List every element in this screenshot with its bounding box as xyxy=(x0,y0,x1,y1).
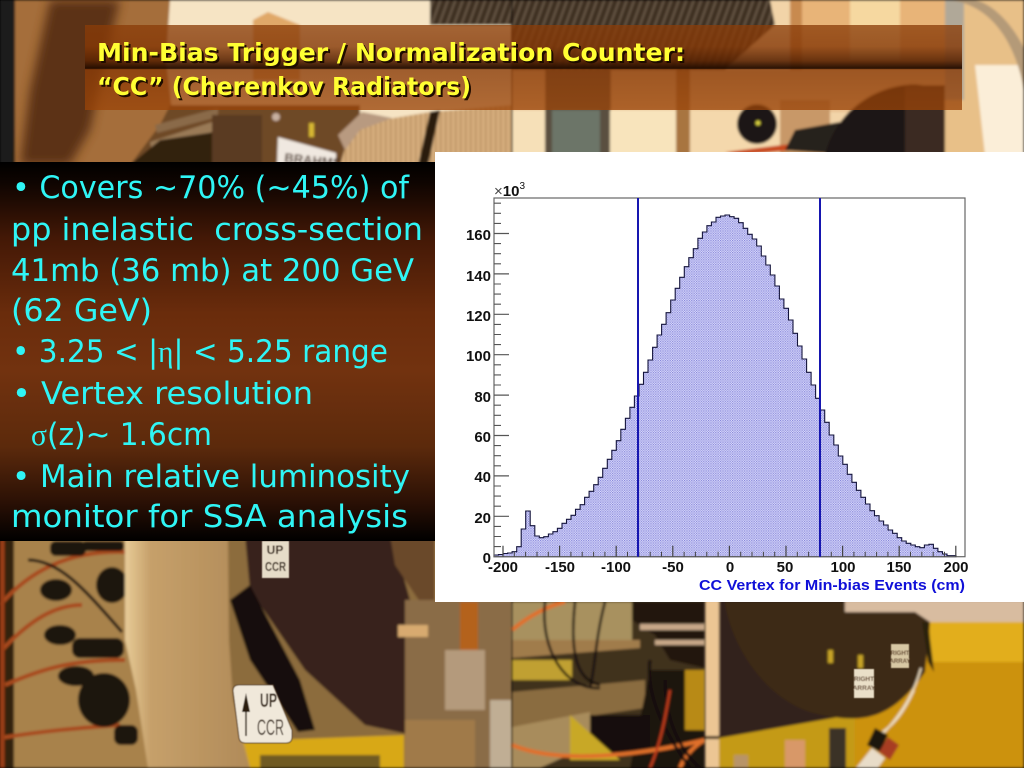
x axis labels: -100 xyxy=(601,559,631,576)
label: RIGHT ARRAY front: RIGHT xyxy=(854,676,874,683)
title text xyxy=(97,38,685,101)
y axis multiplier: ×10 xyxy=(494,183,519,200)
x axis labels xyxy=(488,559,969,576)
photo: top left detector: BRAHMS xyxy=(284,150,342,171)
panel: key facts text: 41mb (36 mb) at 200 GeV xyxy=(11,253,414,289)
x axis labels: -50 xyxy=(662,559,684,576)
label: UP CCR arrow sign xyxy=(233,685,292,743)
y axis labels: 140 xyxy=(466,268,491,285)
histogram bars xyxy=(494,215,956,557)
panel: key facts text: • Vertex resolution xyxy=(12,376,313,412)
chart: CC vertex histogram xyxy=(435,152,1024,602)
label: RIGHT ARRAY rear: ARRAY xyxy=(890,659,910,665)
label: UP CCR arrow sign: UP xyxy=(260,691,277,712)
y axis labels: 80 xyxy=(474,389,491,406)
y axis labels: 20 xyxy=(474,510,491,527)
panel: key facts text xyxy=(0,162,435,541)
y axis ticks xyxy=(494,234,509,516)
label: top UP CCR: CCR xyxy=(265,559,286,574)
y axis labels: 100 xyxy=(466,348,491,365)
vertex cut lines xyxy=(638,198,820,557)
label: top UP CCR: UP xyxy=(267,543,283,557)
x axis labels: 100 xyxy=(830,559,856,576)
title bar xyxy=(85,25,962,110)
label: top UP CCR xyxy=(262,541,289,578)
x axis ticks xyxy=(503,546,956,557)
axis frame xyxy=(494,198,965,557)
x axis labels: 50 xyxy=(777,559,793,576)
y axis labels: 60 xyxy=(474,429,491,446)
photo: top right apparatus xyxy=(512,0,1024,165)
panel: key facts text: pp inelastic cross-section xyxy=(11,212,423,248)
x axis labels: 150 xyxy=(886,559,912,576)
label: RIGHT ARRAY front: ARRAY xyxy=(853,685,876,692)
title text: Min-Bias Trigger / Normalization Counter: xyxy=(97,38,685,67)
photo: bottom left connector plate and CCR drum xyxy=(0,535,512,768)
label: UP CCR arrow sign: CCR xyxy=(257,715,284,740)
y axis labels: 120 xyxy=(466,308,491,325)
panel: key facts text: • 3.25 < |η| < 5.25 range xyxy=(12,334,388,370)
y axis labels: 160 xyxy=(466,227,491,244)
panel: key facts text: • Covers ~70% (~45%) of xyxy=(12,170,410,206)
panel: key facts text: monitor for SSA analysis xyxy=(11,499,408,535)
y axis labels: 40 xyxy=(474,469,491,486)
photo: top left detector xyxy=(0,0,512,171)
photo: bottom middle wiring xyxy=(512,600,705,768)
y axis multiplier: 3 xyxy=(519,181,525,192)
panel: key facts text: (62 GeV) xyxy=(11,293,152,329)
y axis labels: 0 xyxy=(483,550,491,567)
label: RIGHT ARRAY rear xyxy=(890,644,910,668)
y axis labels xyxy=(466,227,491,567)
x axis labels: -150 xyxy=(545,559,575,576)
x axis labels: 200 xyxy=(943,559,969,576)
x axis labels: 0 xyxy=(726,559,734,576)
panel: key facts text: • Main relative luminosity xyxy=(12,459,410,495)
x axis labels: -200 xyxy=(488,559,518,576)
x axis title: CC Vertex for Min-bias Events (cm) xyxy=(699,578,965,594)
panel: key facts text: σ(z)~ 1.6cm xyxy=(31,417,212,453)
label: RIGHT ARRAY front xyxy=(853,669,876,698)
title text: “CC” (Cherenkov Radiators) xyxy=(97,72,471,101)
label: RIGHT ARRAY rear: RIGHT xyxy=(891,651,910,657)
photo: bottom right drum on yellow xyxy=(705,600,1024,768)
